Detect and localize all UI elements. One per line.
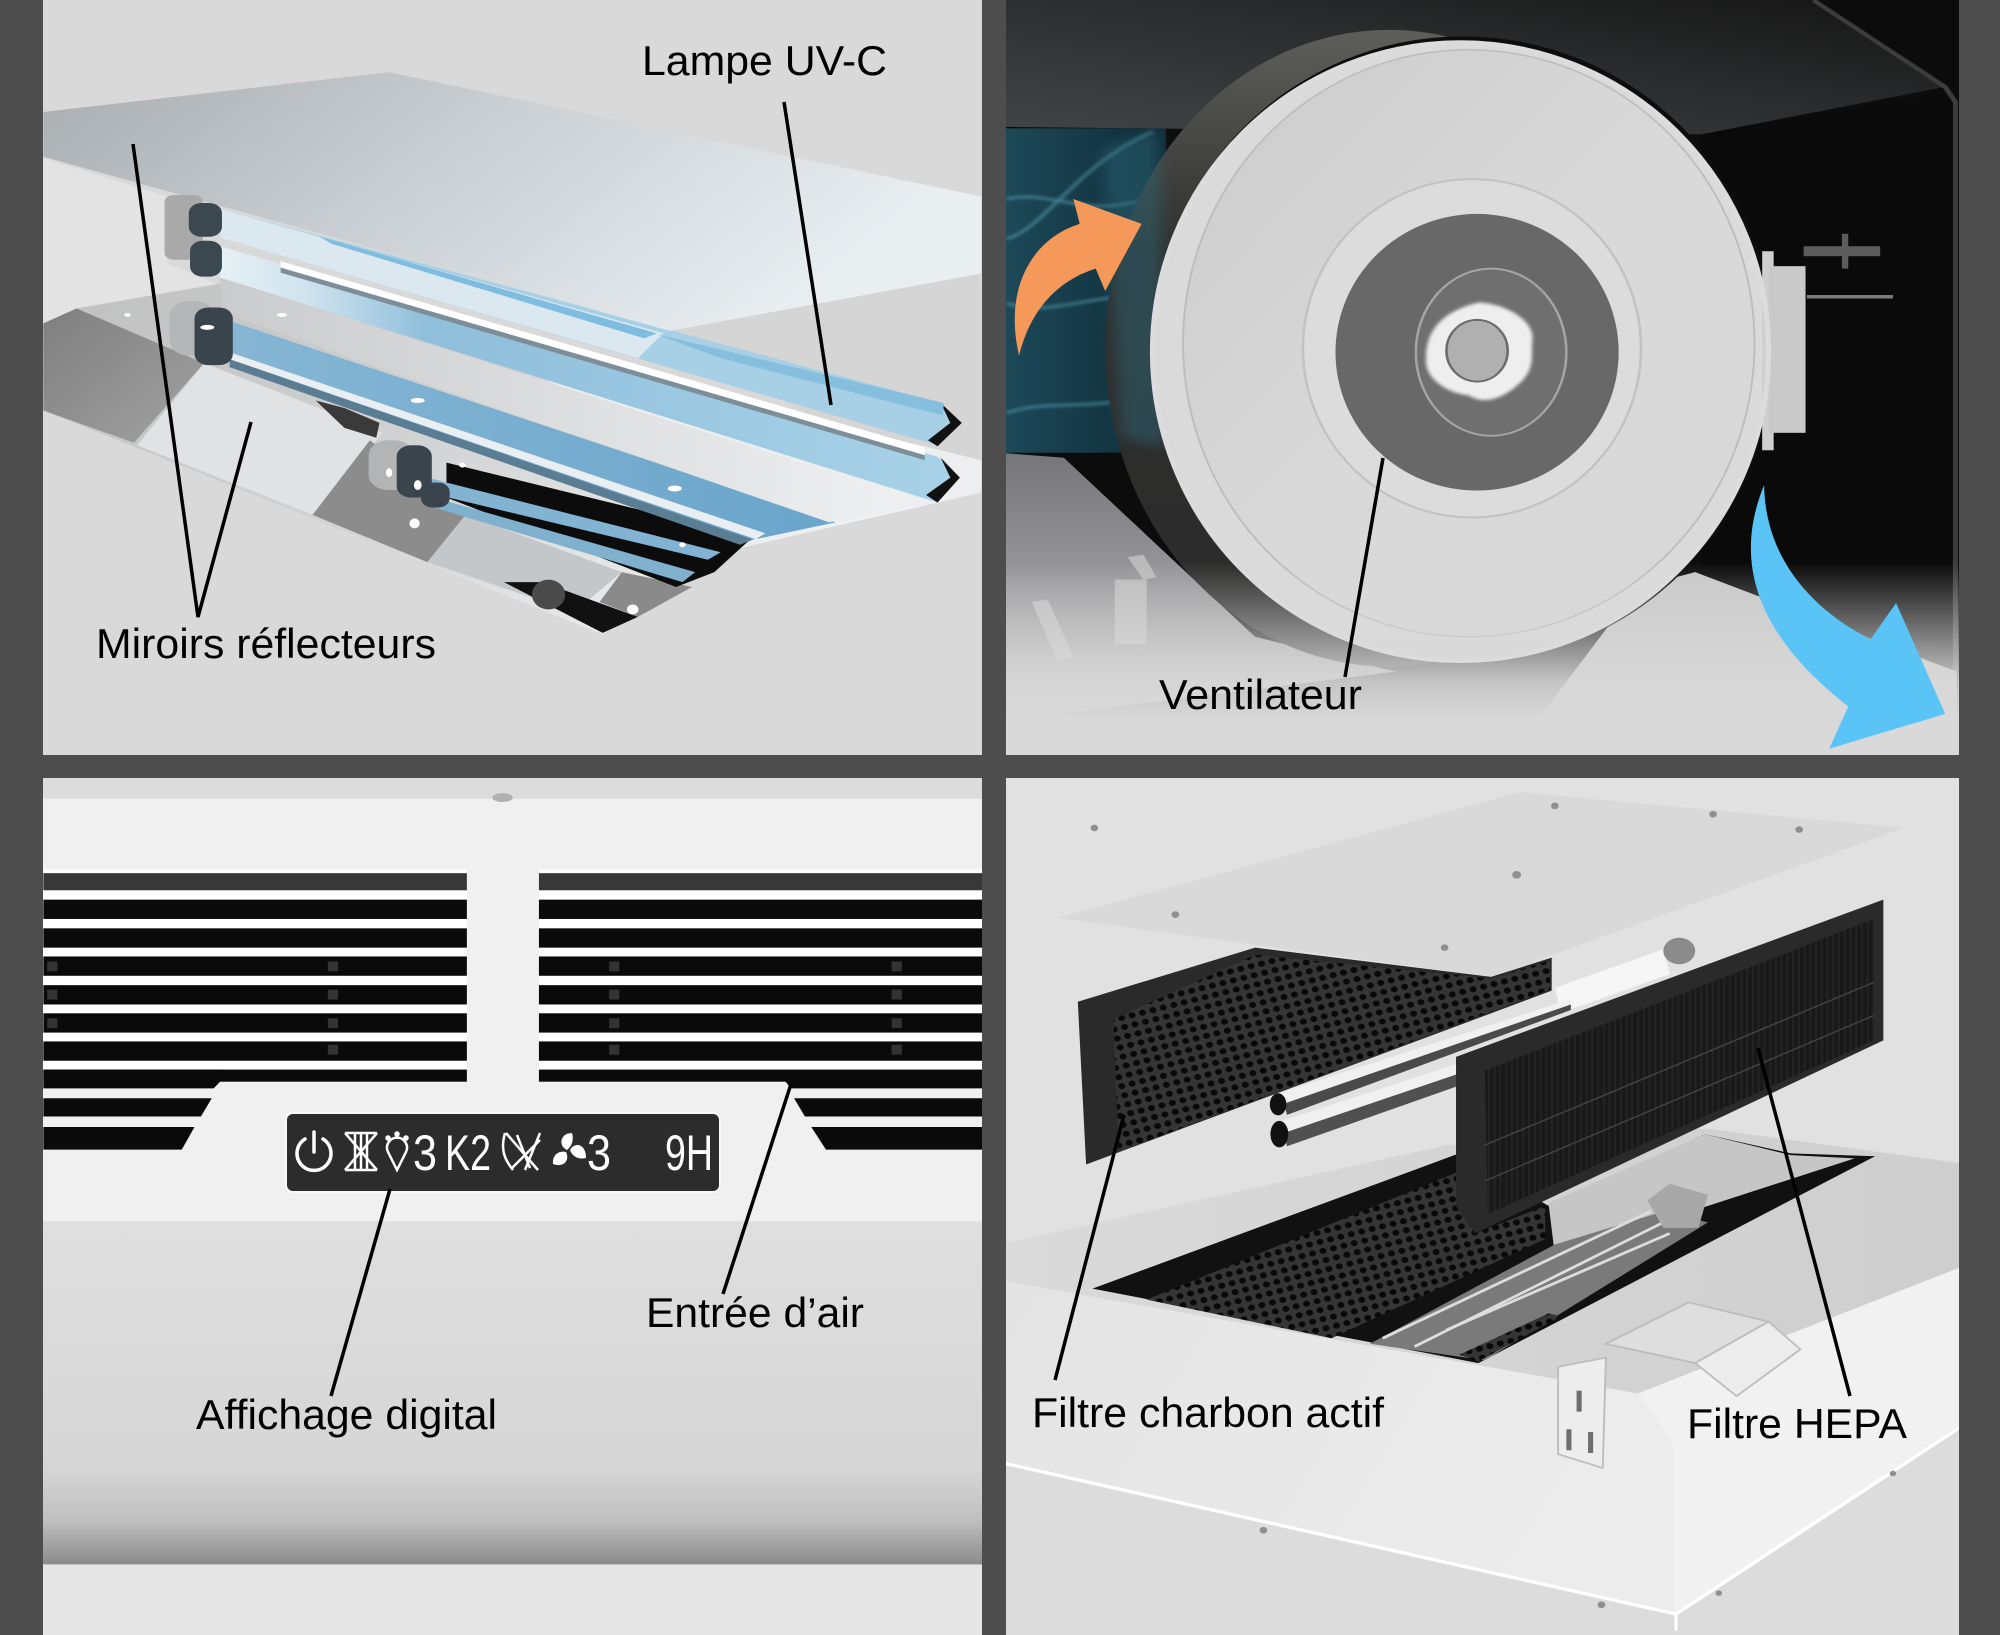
panel: ventilateur (1000, 0, 1969, 796)
callout: Miroirs réflecteurs (96, 144, 436, 667)
illustration: fan with airflow arrows (1000, 0, 1969, 796)
callout: Ventilateur: Ventilateur (1159, 671, 1362, 718)
callout: Filtre charbon actif: Filtre charbon actif (1032, 1389, 1384, 1436)
illustration: exploded housing with filters (1000, 770, 1969, 1635)
display readout: 9H: 9H (665, 1125, 713, 1181)
callout: Ventilateur (1159, 458, 1383, 718)
digital display (285, 1112, 721, 1193)
callout: Filtre HEPA (1687, 1048, 1907, 1447)
callout: Filtre HEPA: Filtre HEPA (1687, 1400, 1907, 1447)
charcoal filter (1078, 948, 1552, 1164)
callout: Lampe UV-C: Lampe UV-C (642, 37, 887, 84)
panel: filtres (1000, 770, 1969, 1635)
callout: Affichage digital: Affichage digital (196, 1391, 497, 1438)
icon: power (297, 1132, 331, 1170)
UV lamps (1270, 938, 1695, 1147)
display readout: lamp level: 3 (413, 1125, 437, 1181)
HEPA filter (1456, 900, 1883, 1233)
illustration: air intake louvres (0, 770, 1020, 1635)
callout: Entrée d'air: Entrée d’air (646, 1289, 864, 1336)
panel: UV-C lamps and reflector mirrors (43, 0, 982, 755)
callout: Lampe UV-C (642, 37, 887, 405)
display readout: K2: K2 (445, 1125, 491, 1181)
callout: Filtre charbon actif (1032, 1115, 1384, 1436)
callout: Entrée d'air (646, 1084, 864, 1336)
arrow: air intake (1015, 199, 1142, 356)
icon: muted sound (503, 1133, 540, 1170)
callout: Miroirs réflecteurs: Miroirs réflecteurs (96, 620, 436, 667)
callout: Affichage digital (196, 1189, 497, 1438)
arrow: air outlet (1751, 485, 1945, 749)
icon: filter crossed (345, 1133, 377, 1170)
illustration: lamps between two mirrors (43, 0, 982, 755)
display readout: fan speed: 3 (587, 1125, 611, 1181)
panel: affichage digital et entrée d'air (0, 770, 1020, 1635)
icon: fan (553, 1133, 586, 1165)
icon: bulb (386, 1132, 408, 1170)
